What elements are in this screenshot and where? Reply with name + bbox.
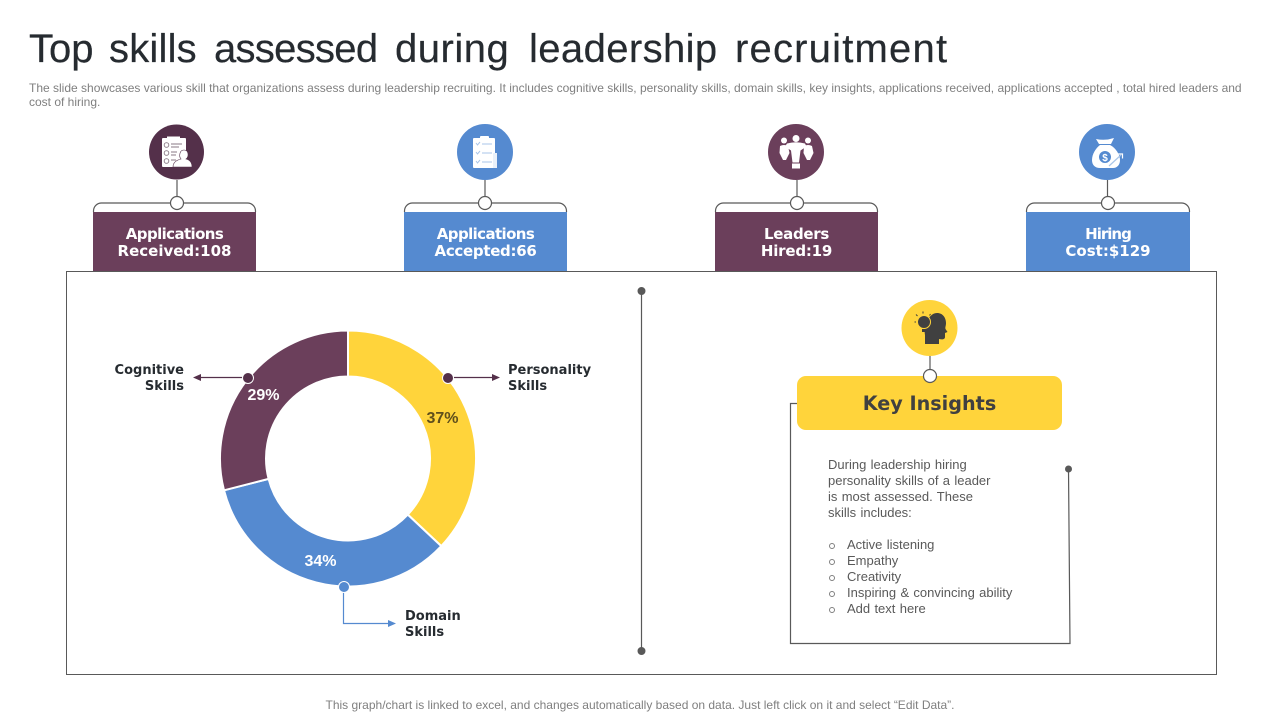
title: during <box>395 27 509 71</box>
callout: cognitive <box>193 372 254 384</box>
insights text frame <box>790 404 1070 644</box>
title <box>29 27 948 71</box>
segment: cognitive 29% <box>220 330 348 490</box>
title: recruitment <box>735 27 948 71</box>
label: domain skills: Domain <box>405 609 461 624</box>
label: cognitive skills: Skills <box>145 379 184 394</box>
card: applications received: Received:108 <box>118 242 231 260</box>
callout: domain <box>338 582 396 627</box>
value: 37%: 37% <box>426 410 459 427</box>
icon: head with light bulb and connector <box>902 300 958 384</box>
segment: personality 37% <box>348 330 476 546</box>
insights text: During leadership hiring <box>828 457 967 472</box>
insights text: Inspiring & convincing ability <box>847 585 1012 600</box>
key insights heading <box>797 376 1062 430</box>
title: leadership <box>529 27 718 71</box>
label: personality skills <box>508 363 591 394</box>
insights text: skills includes: <box>828 505 912 520</box>
card: hiring cost: Cost:$129 <box>1065 242 1151 260</box>
main panel <box>66 271 1217 675</box>
icon: clipboard <box>457 124 513 180</box>
footnote: This graph/chart is linked to excel, and changes automatically based on data. Just left click on it and select “Edit Data”. <box>326 698 954 712</box>
icon: money bag <box>1079 124 1135 180</box>
label: domain skills: Skills <box>405 625 444 640</box>
card: applications accepted: Applications <box>437 225 534 243</box>
title: assessed <box>214 27 377 71</box>
insights text: Empathy <box>847 553 898 568</box>
card: hiring cost <box>1026 212 1190 271</box>
description text <box>29 81 1242 109</box>
insights text: Creativity <box>847 569 901 584</box>
title: Top <box>29 27 94 71</box>
callout: personality <box>442 372 500 384</box>
card: hiring cost: Hiring <box>1085 225 1131 243</box>
connector: hiring cost <box>1026 180 1190 212</box>
card: leaders hired <box>715 212 878 271</box>
donut chart <box>220 330 476 586</box>
card: leaders hired: Hired:19 <box>761 242 832 260</box>
insights text: Add text here <box>847 601 926 616</box>
icon: applicant checklist <box>149 124 204 180</box>
description text: cost of hiring. <box>29 95 100 109</box>
card: leaders hired: Leaders <box>764 225 829 243</box>
card: applications received: Applications <box>126 225 223 243</box>
value: 29%: 29% <box>247 387 280 404</box>
icon: money bag: $ <box>1102 153 1108 164</box>
insights text: is most assessed. These <box>828 489 973 504</box>
insights text <box>828 457 1012 616</box>
frame end dot <box>1065 466 1072 472</box>
label: domain skills <box>405 609 461 640</box>
label: personality skills: Skills <box>508 379 547 394</box>
connector: applications accepted <box>404 180 566 212</box>
insights text: personality skills of a leader <box>828 473 990 488</box>
label: cognitive skills: Cognitive <box>115 363 184 378</box>
card: applications accepted: Accepted:66 <box>435 242 536 260</box>
connector: leaders hired <box>716 180 878 212</box>
icon: leaders group <box>768 124 824 180</box>
card: applications accepted <box>404 212 567 271</box>
description text: The slide showcases various skill that organizations assess during leadership recruiting. It includes cognitive skills, personality skills, domain skills, key insights, applications received, applications accepted , total hired leaders and <box>29 81 1242 95</box>
card: applications received <box>93 212 256 271</box>
label: personality skills: Personality <box>508 363 591 378</box>
title: skills <box>109 27 197 71</box>
value: 34%: 34% <box>304 553 337 570</box>
key insights heading: Key Insights <box>863 392 996 415</box>
connector: applications received <box>94 180 256 212</box>
label: cognitive skills <box>115 363 184 394</box>
divider line <box>638 288 645 654</box>
segment: domain 34% <box>224 479 441 586</box>
insights text: Active listening <box>847 537 934 552</box>
